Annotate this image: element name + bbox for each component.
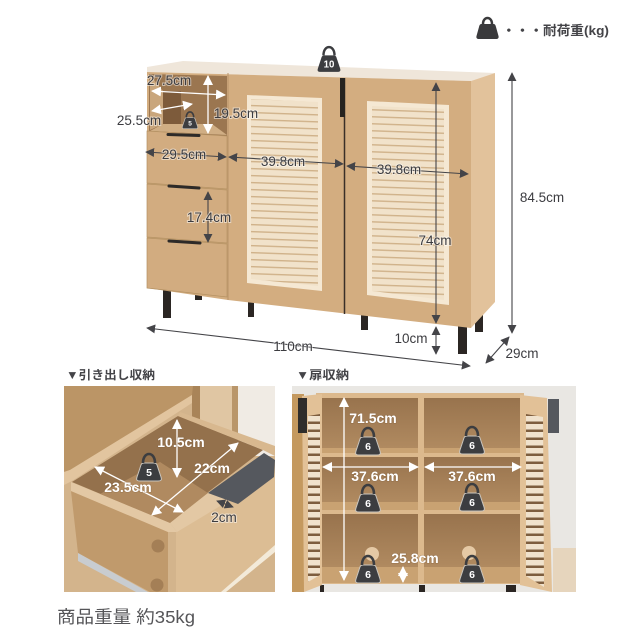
dimension arrows: drawer xyxy=(95,420,238,515)
dimension arrows: cabinet xyxy=(146,73,512,366)
weight icon: niche 5: 5 xyxy=(188,121,192,128)
weight icon: drawer 5 xyxy=(137,454,161,481)
dimension labels: door storage: 71.5cm xyxy=(349,410,397,426)
dimension labels: cabinet: 27.5cm xyxy=(147,73,191,88)
weight icons: door shelves: 6 xyxy=(469,569,475,581)
dimension labels: cabinet: 17.4cm xyxy=(187,210,231,225)
dimension labels: cabinet: 25.5cm xyxy=(117,113,161,128)
cabinet interior xyxy=(316,393,524,584)
weight icons: door shelves xyxy=(356,427,484,583)
drawer left face xyxy=(71,491,168,592)
drawer rim: far side xyxy=(178,412,275,456)
dimension labels: door storage: 37.6cm xyxy=(448,468,496,484)
dimension labels: door storage xyxy=(349,410,496,566)
drawer right face xyxy=(176,473,275,592)
photo: open drawer xyxy=(64,386,275,592)
heading: drawer storage: ▼引き出し収納 xyxy=(66,367,155,382)
legend: load capacity xyxy=(476,18,609,39)
dimension labels: cabinet: 29cm xyxy=(505,346,539,361)
heading: door storage: ▼扉収納 xyxy=(296,367,349,382)
dimension labels: cabinet xyxy=(117,73,564,361)
drawer interior xyxy=(72,416,263,523)
drawer slide xyxy=(78,553,148,592)
door handle xyxy=(340,78,345,117)
dimension labels: cabinet: 110cm xyxy=(273,339,313,354)
weight icon: top 10 xyxy=(318,47,340,72)
upper shelf xyxy=(64,386,193,472)
metal handle xyxy=(208,453,275,504)
cabinet illustration xyxy=(147,61,495,354)
cabinet front body xyxy=(147,72,471,328)
weight icons: door shelves: 6 xyxy=(365,569,371,581)
dimension labels: door storage: 37.6cm xyxy=(351,468,399,484)
weight icons: door shelves: 6 xyxy=(469,497,475,509)
dimension labels: drawer: 10.5cm xyxy=(157,434,205,450)
dimension labels: cabinet: 74cm xyxy=(418,233,452,248)
product weight text: 商品重量 約35kg xyxy=(57,607,195,627)
dimension labels: drawer: 22cm xyxy=(194,460,230,476)
dimension arrows: door storage xyxy=(323,398,521,582)
wooden dowels xyxy=(152,540,164,552)
dimension labels: cabinet: 39.8cm xyxy=(377,162,421,177)
dimension labels: drawer: 23.5cm xyxy=(104,479,152,495)
dimension labels: door storage: 25.8cm xyxy=(391,550,439,566)
dimension labels: drawer xyxy=(104,434,237,525)
dimension labels: cabinet: 29.5cm xyxy=(162,147,206,162)
right open door xyxy=(520,395,559,592)
background door xyxy=(192,386,200,436)
right door louver xyxy=(367,101,449,305)
cabinet top surface xyxy=(147,61,495,81)
weight icon: drawer 5: 5 xyxy=(146,467,152,479)
dimension labels: drawer: 2cm xyxy=(211,510,237,525)
dimension labels: cabinet: 19.5cm xyxy=(214,106,258,121)
lower drawer xyxy=(221,545,275,592)
weight icon: niche 5 xyxy=(182,112,198,129)
feet xyxy=(320,585,516,592)
drawer rim: near side xyxy=(71,482,177,532)
dimension labels: cabinet: 10cm xyxy=(394,331,428,346)
left open door xyxy=(298,394,322,592)
dimension labels: cabinet: 84.5cm xyxy=(520,190,564,205)
legend: load capacity: ・・・耐荷重(kg) xyxy=(502,23,609,38)
cabinet legs xyxy=(163,290,483,354)
open niche xyxy=(149,74,227,136)
cabinet side panel xyxy=(471,73,495,328)
weight icons: door shelves: 6 xyxy=(365,498,371,510)
weight icons: door shelves: 6 xyxy=(469,440,475,452)
dimension labels: cabinet: 39.8cm xyxy=(261,154,305,169)
photo: door storage xyxy=(292,386,576,592)
drawer fronts xyxy=(147,131,227,297)
weight icons: door shelves: 6 xyxy=(365,441,371,453)
drawer handles xyxy=(168,134,200,243)
left door louver xyxy=(247,95,322,291)
cabinet dowels xyxy=(365,547,379,561)
weight icon: top 10: 10 xyxy=(324,59,334,70)
door divider xyxy=(228,73,344,314)
shelves xyxy=(322,448,520,583)
